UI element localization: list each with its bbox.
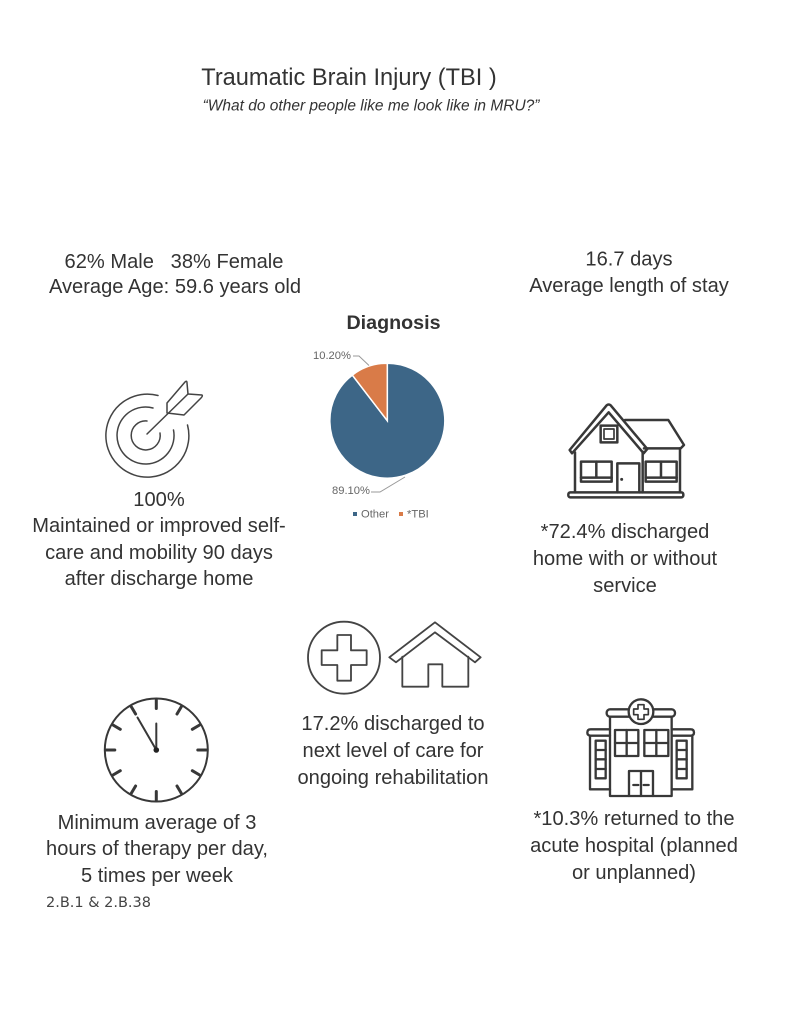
text: therapy minutes: Minimum average of 3 <box>58 812 256 834</box>
text: returned to acute hospital <box>530 808 738 884</box>
text: gender and age: Average Age: 59.6 years old <box>49 276 301 298</box>
text: returned to acute hospital: or unplanned) <box>572 862 696 884</box>
reference note: 2.B.1 & 2.B.38 <box>46 895 151 911</box>
label: 89.10%: 89.10% <box>332 485 370 497</box>
text: self-care outcome: care and mobility 90 days <box>45 542 273 564</box>
text: next level of care: ongoing rehabilitation <box>297 767 489 789</box>
pie chart: diagnosis <box>313 312 445 520</box>
text: next level of care: 17.2% discharged to <box>301 713 485 735</box>
text: therapy minutes: 5 times per week <box>81 865 234 887</box>
text: returned to acute hospital: acute hospital (planned <box>530 835 738 857</box>
pie slice: other <box>330 363 445 478</box>
pie slice: TBI <box>352 363 387 421</box>
text: next level of care: next level of care for <box>303 740 484 762</box>
text: length of stay <box>529 248 729 297</box>
icon: target with arrow <box>106 381 202 477</box>
text: length of stay: 16.7 days <box>585 248 673 270</box>
icon: clock <box>105 698 208 802</box>
title: Traumatic Brain Injury (TBI ) <box>201 65 497 91</box>
text: gender and age: 62% Male 38% Female <box>65 251 283 273</box>
text: discharged home: home with or without <box>533 548 718 570</box>
text: discharged home: *72.4% discharged <box>541 521 709 543</box>
text: therapy minutes <box>46 812 268 887</box>
label: 10.20%: 10.20% <box>313 350 351 362</box>
text: self-care outcome <box>32 489 286 590</box>
text: self-care outcome: Maintained or improved self- <box>32 515 286 537</box>
icon: house <box>568 404 684 497</box>
label: 10.20% <box>313 350 369 366</box>
text: length of stay: Average length of stay <box>529 275 729 297</box>
text: self-care outcome: after discharge home <box>65 568 253 590</box>
text: self-care outcome: 100% <box>133 489 185 511</box>
text: next level of care <box>297 713 489 789</box>
icon: hospital <box>587 699 694 796</box>
text: returned to acute hospital: *10.3% returned to the <box>533 808 735 830</box>
legend <box>353 508 429 520</box>
text: gender and age <box>49 251 301 298</box>
label: 89.10% <box>332 477 405 497</box>
text: discharged home: service <box>593 575 657 597</box>
text: therapy minutes: hours of therapy per day, <box>46 838 268 860</box>
legend: *TBI <box>407 508 429 520</box>
legend: Other <box>361 508 389 520</box>
icon: medical cross and house <box>308 622 481 694</box>
subtitle: “What do other people like me look like in MRU?” <box>203 98 540 114</box>
chart heading: Diagnosis <box>346 312 441 334</box>
text: discharged home <box>533 521 718 597</box>
